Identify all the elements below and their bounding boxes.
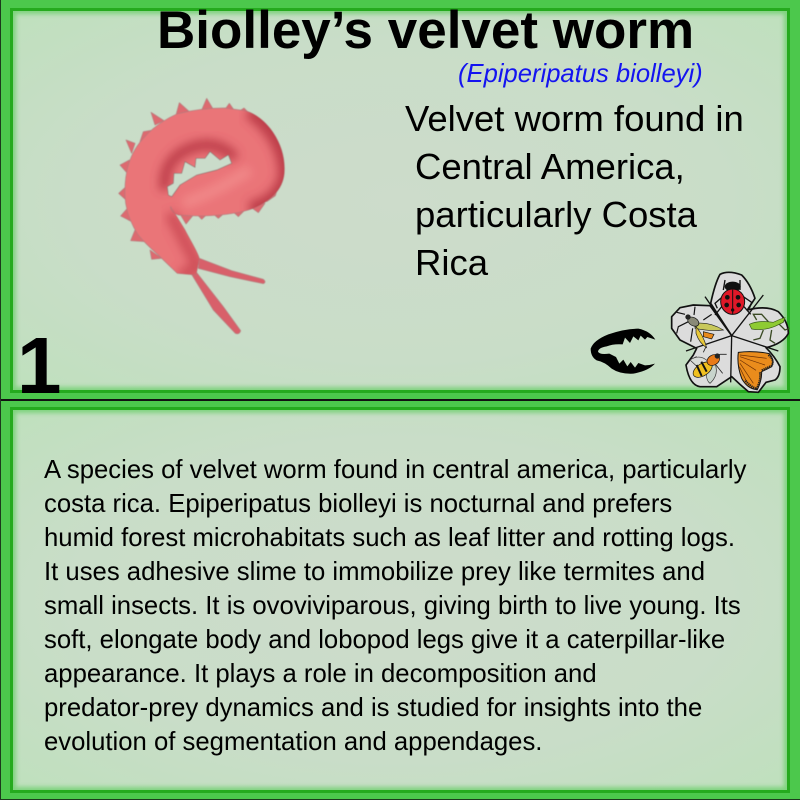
panel: bottom card <box>10 407 790 793</box>
insect: wasp with wings <box>690 347 727 383</box>
short description: Rica <box>415 242 488 283</box>
body text: A species of velvet worm found in central america, particularly <box>44 456 746 484</box>
insect: ladybug <box>715 280 752 315</box>
body text: It uses adhesive slime to immobilize prey like termites and <box>44 558 705 586</box>
insect: butterfly <box>738 352 773 390</box>
body text: predator-prey dynamics and is studied for insights into the <box>44 694 702 722</box>
petal background <box>672 272 788 392</box>
panel: top card <box>10 8 790 393</box>
body text <box>44 456 746 756</box>
short description <box>405 98 744 283</box>
short description: Central America, <box>415 146 685 187</box>
card number: 1 <box>17 321 62 410</box>
insect: mantis <box>749 314 789 343</box>
illustration: velvet worm <box>118 98 286 335</box>
short description: particularly Costa <box>415 194 697 235</box>
scientific name: (Epiperipatus biolleyi) <box>458 60 703 88</box>
icon: prey insects flower <box>670 272 790 394</box>
left edge line <box>0 0 1 800</box>
body text: costa rica. Epiperipatus biolleyi is nocturnal and prefers <box>44 490 672 518</box>
body text: humid forest microhabitats such as leaf litter and rotting logs. <box>44 524 735 552</box>
body text: soft, elongate body and lobopod legs give it a caterpillar-like <box>44 626 725 654</box>
body text: small insects. It is ovoviviparous, giving birth to live young. Its <box>44 592 741 620</box>
petal dividers <box>686 295 778 382</box>
title: Biolley’s velvet worm <box>157 1 694 60</box>
insect: hoverfly <box>677 307 723 348</box>
divider <box>0 399 800 401</box>
short description: Velvet worm found in <box>405 98 744 139</box>
icon: predator jaws <box>590 328 656 374</box>
body text: appearance. It plays a role in decomposition and <box>44 660 597 688</box>
bottom edge line <box>0 799 800 800</box>
body text: evolution of segmentation and appendages. <box>44 728 542 756</box>
